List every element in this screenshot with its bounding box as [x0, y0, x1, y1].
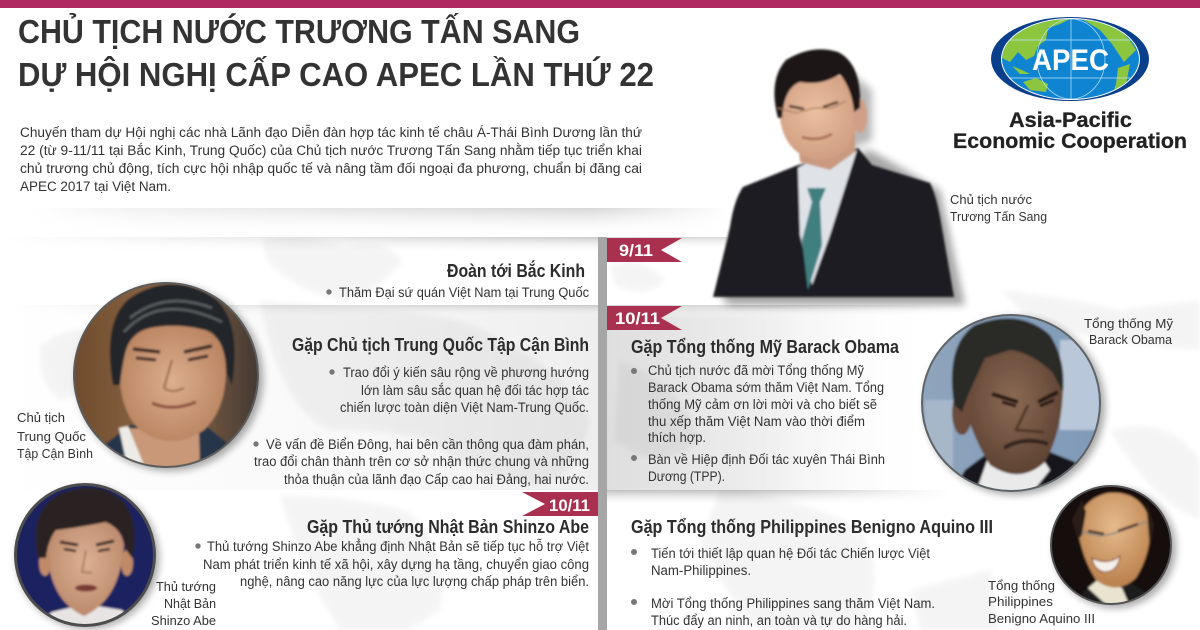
portrait: Xi Jinping — [70, 280, 270, 480]
caption: Barack Obama: Tổng thống Mỹ — [1084, 316, 1174, 331]
title — [18, 13, 654, 93]
block: meeting Benigno Aquino III: Mời Tổng thống Philippines sang thăm Việt Nam. — [651, 596, 935, 611]
caption: Truong Tan Sang: Trương Tấn Sang — [950, 209, 1047, 224]
block: meeting Benigno Aquino III: Tiến tới thiết lập quan hệ Đối tác Chiến lược Việt — [651, 546, 930, 561]
logo wordmark APEC: APEC — [1032, 44, 1109, 77]
block: meeting Shinzo Abe — [195, 517, 589, 589]
suit — [713, 148, 954, 297]
caption: Xi Jinping: Tập Cận Bình — [17, 446, 93, 461]
caption: Xi Jinping: Chủ tịch — [17, 410, 65, 425]
glasses — [778, 101, 846, 113]
date flag 10/11 right: 10/11 — [615, 309, 660, 328]
block: arrival in Beijing: Đoàn tới Bắc Kinh — [447, 260, 585, 281]
caption: Benigno Aquino III: Philippines — [988, 594, 1054, 609]
date flag 10/11 left — [522, 492, 598, 516]
title: DỰ HỘI NGHỊ CẤP CAO APEC LẦN THỨ 22 — [18, 55, 654, 93]
block: meeting Xi Jinping — [253, 335, 589, 487]
block: meeting Barack Obama: Gặp Tổng thống Mỹ Barack Obama — [631, 337, 900, 357]
world map watermark — [40, 237, 1200, 630]
caption: Truong Tan Sang — [950, 192, 1047, 224]
caption: Shinzo Abe: Nhật Bản — [164, 596, 216, 611]
intro paragraph — [20, 125, 642, 194]
background paper bands — [0, 208, 980, 510]
block: meeting Barack Obama: thu xếp thăm Việt Nam vào thời điểm — [648, 414, 865, 429]
block: meeting Xi Jinping: lớn làm sâu sắc quan hệ đối tác hợp tác — [361, 383, 589, 398]
APEC logo — [953, 17, 1187, 153]
logo globe — [991, 17, 1149, 101]
portrait: Truong Tan Sang — [713, 49, 965, 305]
block: meeting Shinzo Abe: Nam phát triển kinh tế xã hội, xây dựng hạ tầng, chuyển giao công — [203, 557, 589, 572]
block: meeting Shinzo Abe: nghệ, nâng cao năng lực của lực lượng chấp pháp trên biển. — [240, 574, 589, 589]
block: meeting Benigno Aquino III: Nam-Philippines. — [651, 563, 751, 578]
block: meeting Xi Jinping: Trao đổi ý kiến sâu rộng về phương hướng — [343, 365, 589, 380]
tie — [802, 188, 826, 290]
block: meeting Barack Obama — [631, 337, 900, 484]
organisation name: Economic Cooperation — [953, 129, 1187, 153]
block: meeting Xi Jinping: thỏa thuận của lãnh đạo Cấp cao hai Đảng, hai nước. — [284, 472, 589, 487]
block: meeting Barack Obama: Bàn về Hiệp định Đối tác xuyên Thái Bình — [648, 452, 885, 467]
block: meeting Xi Jinping: chiến lược toàn diện Việt Nam-Trung Quốc. — [340, 400, 589, 415]
shirt — [798, 150, 857, 285]
title: CHỦ TỊCH NƯỚC TRƯƠNG TẤN SANG — [18, 13, 580, 50]
block: meeting Shinzo Abe: Gặp Thủ tướng Nhật Bản Shinzo Abe — [307, 517, 589, 537]
block: meeting Barack Obama: thống Mỹ cảm ơn lời mời và cho biết sẽ — [648, 397, 877, 412]
caption: Shinzo Abe: Thủ tướng — [156, 579, 216, 594]
date flag 9/11 — [607, 238, 682, 262]
block: meeting Benigno Aquino III: Thúc đẩy an ninh, an toàn và tự do hàng hải. — [651, 613, 907, 628]
block: arrival in Beijing — [326, 260, 589, 300]
portrait: Shinzo Abe — [10, 480, 160, 630]
block: meeting Barack Obama: Barack Obama sớm thăm Việt Nam. Tổng — [648, 380, 884, 395]
caption: Benigno Aquino III: Tổng thống — [988, 578, 1055, 593]
top accent bar — [0, 0, 1200, 8]
caption: Xi Jinping — [17, 410, 93, 461]
block: meeting Xi Jinping: Về vấn đề Biển Đông, hai bên cần thông qua đàm phán, — [266, 437, 589, 452]
block: meeting Shinzo Abe: Thủ tướng Shinzo Abe khẳng định Nhật Bản sẽ tiếp tục hỗ trợ Việt — [207, 539, 589, 554]
intro paragraph: APEC 2017 tại Việt Nam. — [20, 179, 171, 194]
intro paragraph: chủ trương chủ động, tích cực hội nhập quốc tế và nâng tầm đối ngoại đa phương, chuẩn bị đăng cai — [20, 161, 642, 176]
block: meeting Barack Obama: thích hợp. — [648, 430, 706, 445]
portrait: Benigno Aquino III — [1045, 480, 1176, 610]
organisation name: Asia-Pacific — [1009, 108, 1132, 132]
intro paragraph: Chuyến tham dự Hội nghị các nhà Lãnh đạo Diễn đàn hợp tác kinh tế châu Á-Thái Bình Dương lần thứ — [20, 125, 642, 140]
block: meeting Barack Obama: Chủ tịch nước đã mời Tổng thống Mỹ — [648, 363, 864, 378]
caption: Barack Obama: Barack Obama — [1089, 332, 1173, 347]
face — [779, 72, 860, 160]
caption: Shinzo Abe: Shinzo Abe — [151, 613, 216, 628]
block: arrival in Beijing: Thăm Đại sứ quán Việt Nam tại Trung Quốc — [339, 285, 589, 300]
caption: Barack Obama — [1084, 316, 1174, 347]
date flag 10/11 right — [607, 306, 682, 330]
block: meeting Benigno Aquino III: Gặp Tổng thống Philippines Benigno Aquino III — [631, 517, 993, 537]
block: meeting Benigno Aquino III — [631, 517, 993, 628]
block: meeting Barack Obama: Dương (TPP). — [648, 469, 725, 484]
hair — [774, 49, 860, 118]
neck — [798, 130, 855, 170]
organisation name — [953, 108, 1187, 153]
date flag 9/11: 9/11 — [619, 241, 653, 260]
block: meeting Xi Jinping: Gặp Chủ tịch Trung Quốc Tập Cận Bình — [292, 335, 589, 355]
date flag 10/11 left: 10/11 — [549, 496, 590, 515]
caption: Benigno Aquino III: Benigno Aquino III — [988, 611, 1095, 626]
eyes and mouth — [789, 102, 838, 109]
block: meeting Xi Jinping: trao đổi chân thành trên cơ sở nhận thức chung và những — [254, 454, 589, 469]
caption: Benigno Aquino III — [988, 578, 1095, 626]
intro paragraph: 22 (từ 9-11/11 tại Bắc Kinh, Trung Quốc) của Chủ tịch nước Trương Tấn Sang nhằm tiếp tục triển khai — [20, 143, 642, 158]
caption: Xi Jinping: Trung Quốc — [17, 429, 86, 444]
caption: Shinzo Abe — [151, 579, 216, 628]
timeline vertical bar — [598, 237, 607, 630]
caption: Truong Tan Sang: Chủ tịch nước — [950, 192, 1032, 207]
portrait: Barack Obama — [915, 310, 1105, 500]
